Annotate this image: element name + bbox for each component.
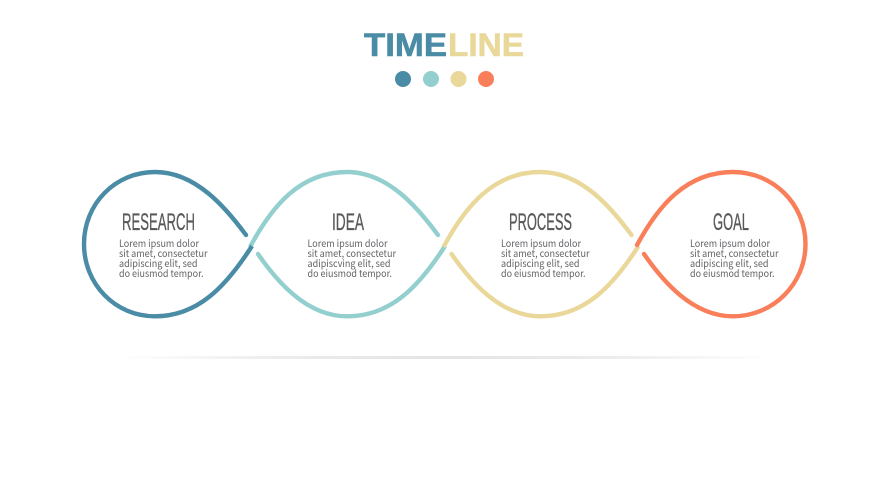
step: research: Lorem ipsum dolor: [119, 235, 199, 250]
legend dots: [395, 71, 494, 87]
title: [364, 27, 524, 63]
step: process: adipiscing elit, sed: [501, 255, 580, 270]
loop: goal: [635, 172, 806, 316]
step: idea: do eiusmod tempor.: [308, 265, 392, 280]
step: goal: GOAL: [713, 209, 749, 236]
step: goal: adipiscing elit, sed: [690, 255, 768, 270]
step: research: do eiusmod tempor.: [119, 265, 204, 280]
step: idea: Lorem ipsum dolor: [308, 235, 388, 250]
step: idea: adipiscving elit, sed: [308, 255, 390, 270]
step: process: sit amet, consectetur: [501, 245, 590, 260]
step: research: sit amet, consectetur: [119, 245, 208, 260]
step: process: do eiusmod tempor.: [501, 265, 586, 280]
ground shadow: [115, 356, 775, 359]
step: goal: do eiusmod tempor.: [690, 265, 775, 280]
step: process: Lorem ipsum dolor: [501, 235, 581, 250]
step: process: PROCESS: [509, 209, 572, 236]
step: research: [119, 209, 208, 280]
title: TIME: [364, 27, 447, 63]
step: idea: [308, 209, 396, 280]
loop: idea: [250, 172, 445, 316]
step: idea: sit amet, consectetur: [308, 245, 396, 260]
step: process: [501, 209, 590, 280]
step: research: RESEARCH: [122, 209, 195, 236]
step: goal: Lorem ipsum dolor: [690, 235, 770, 250]
title: LINE: [448, 27, 524, 63]
loop: process: [444, 172, 638, 316]
step: idea: IDEA: [332, 209, 364, 236]
step: research: adipiscing elit, sed: [119, 255, 198, 270]
step: goal: sit amet, consectetur: [690, 245, 779, 260]
loop: research: [84, 172, 252, 316]
step: goal: [690, 209, 779, 280]
